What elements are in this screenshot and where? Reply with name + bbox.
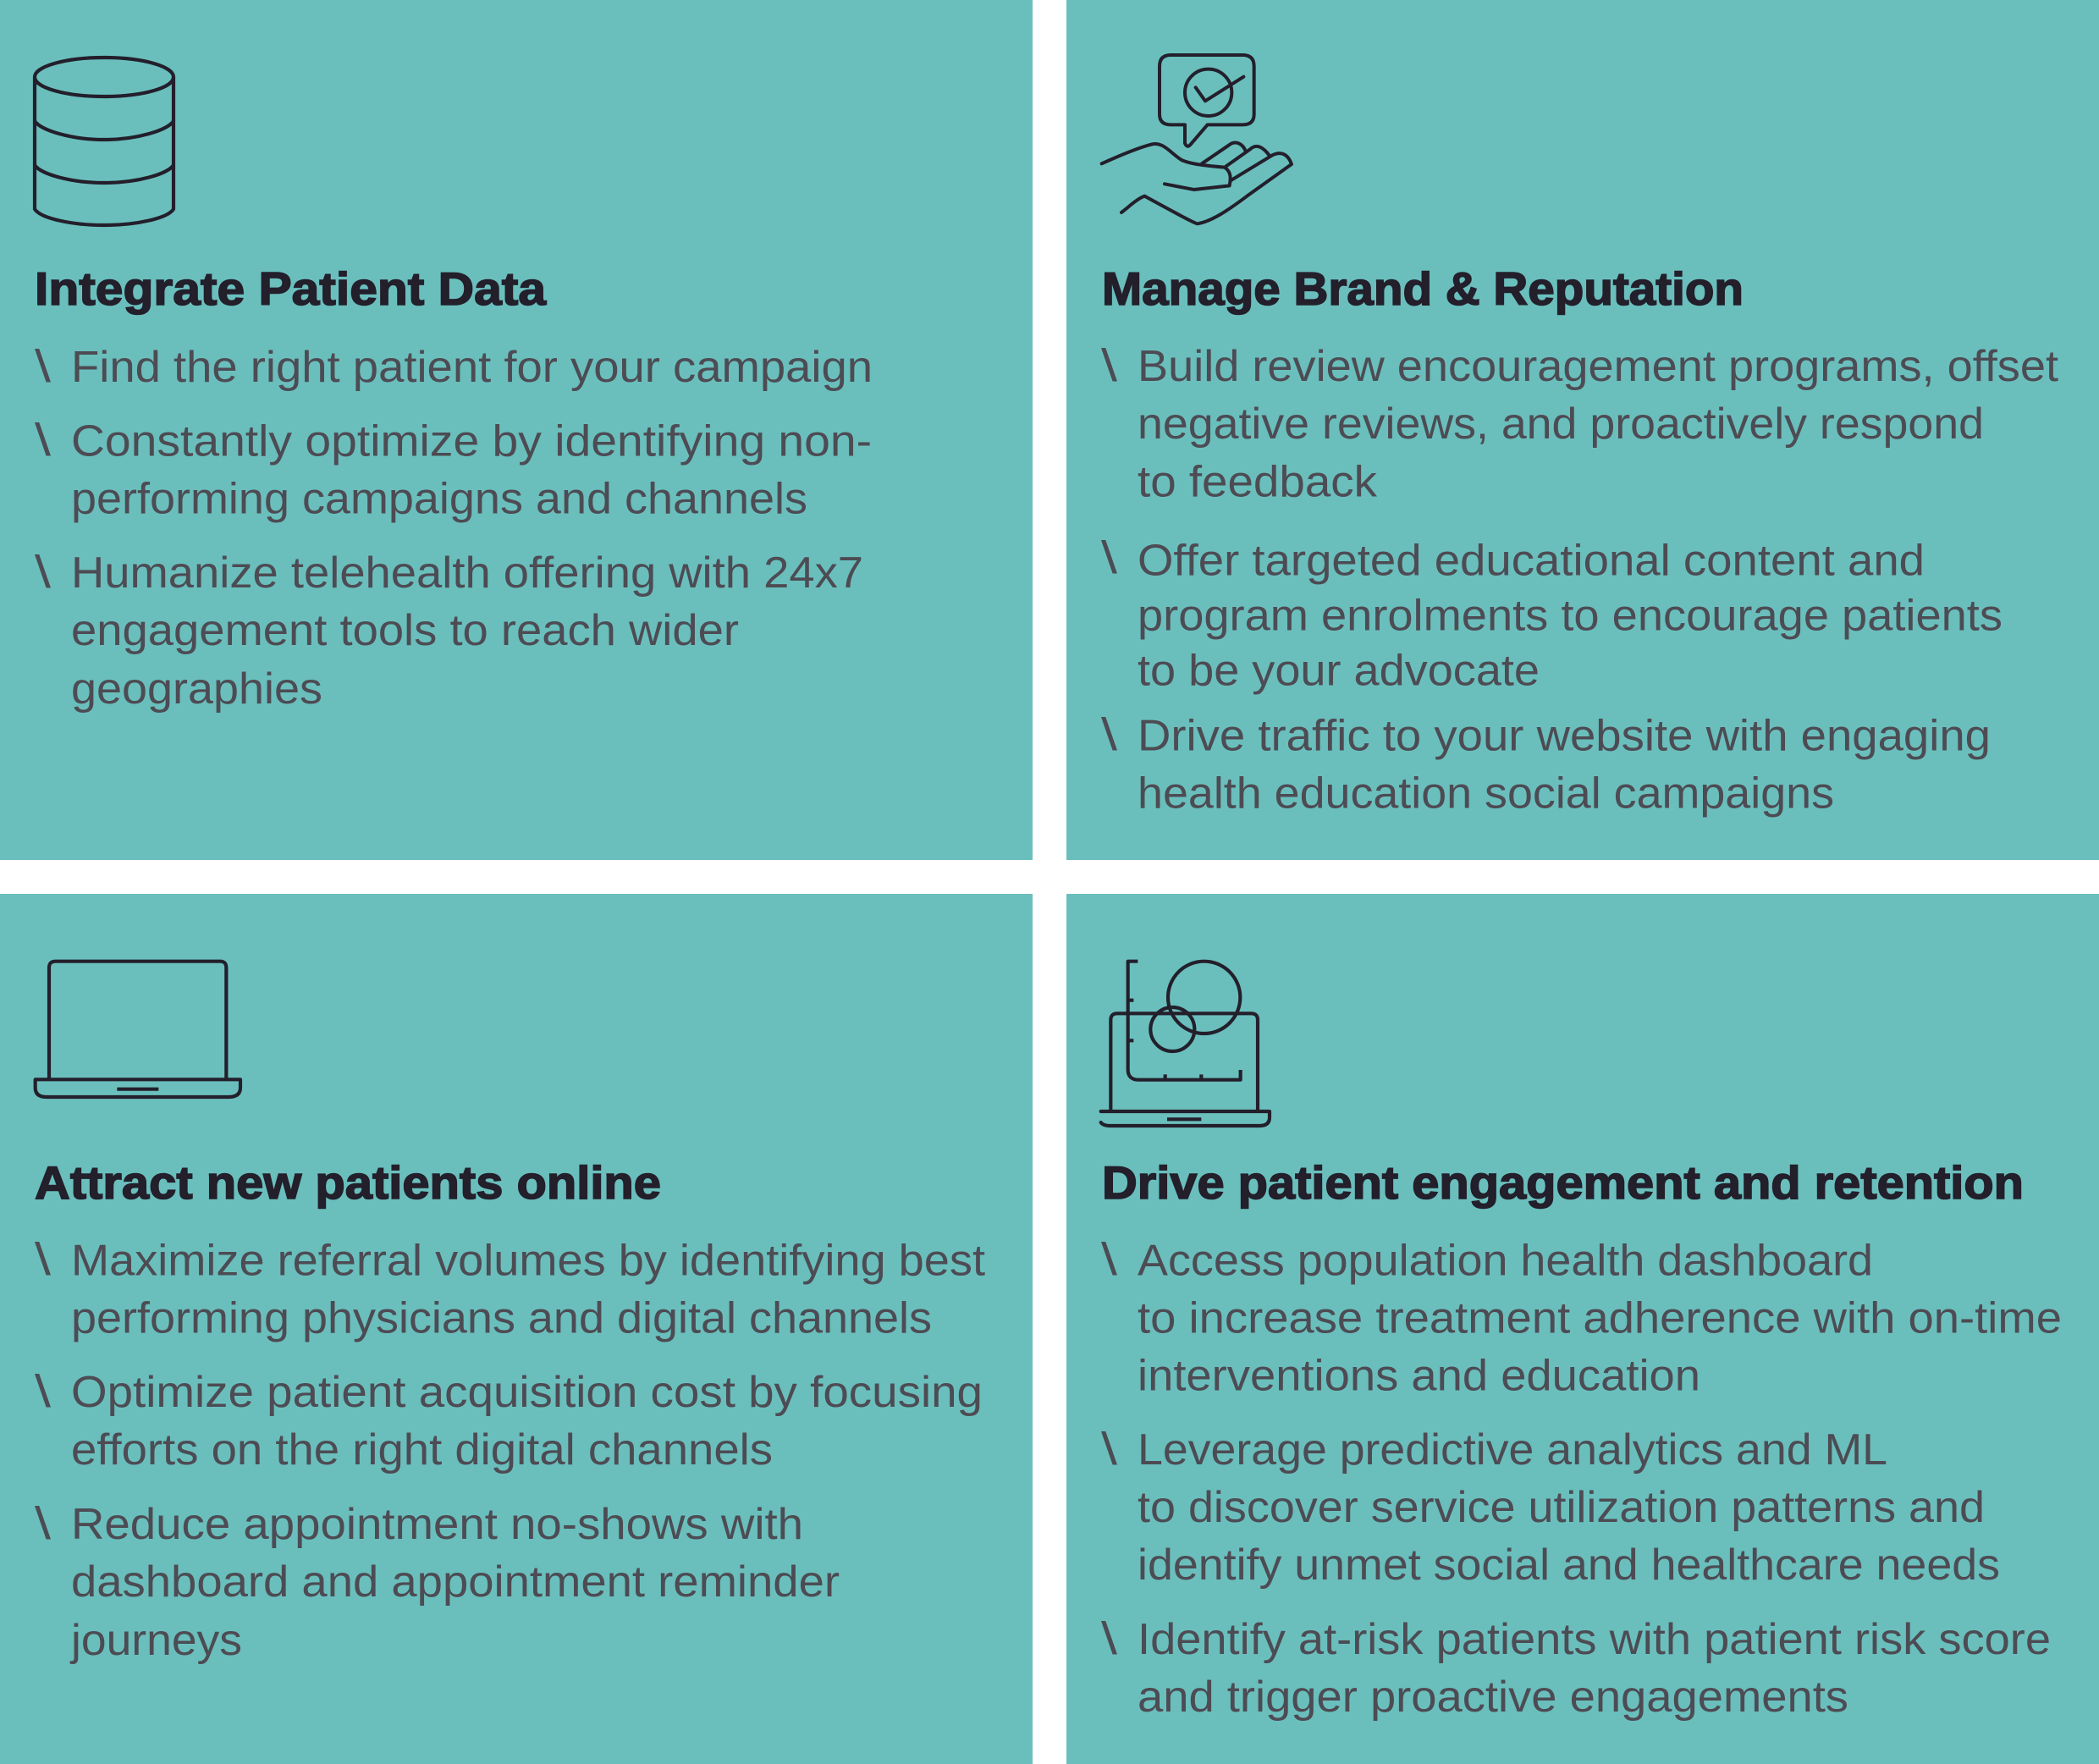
icon: database [35, 58, 174, 225]
bullet list: integrate patient data: \ [35, 547, 51, 598]
bullet list: integrate patient data: geographies [71, 664, 322, 714]
bullet list: integrate patient data: engagement tools to reach wider [71, 606, 739, 655]
bullet list: drive patient engagement and retention: identify unmet social and healthcare needs [1138, 1541, 2000, 1590]
bullet list: manage brand and reputation [1101, 340, 2059, 818]
heading: attract new patients online: Attract new patients online [35, 1156, 661, 1209]
bullet list: manage brand and reputation: to feedback [1138, 457, 1378, 506]
bullet list: integrate patient data: Find the right patient for your campaign [71, 343, 873, 392]
bullet list: manage brand and reputation: health education social campaigns [1138, 769, 1834, 818]
bullet list: drive patient engagement and retention [1101, 1234, 2062, 1722]
bullet list: attract new patients online: \ [35, 1366, 51, 1417]
bullet list: attract new patients online: efforts on the right digital channels [71, 1425, 773, 1475]
bullet list: drive patient engagement and retention: to increase treatment adherence with on-time [1138, 1293, 2062, 1342]
bullet list: attract new patients online [35, 1234, 986, 1665]
bullet list: attract new patients online: \ [35, 1234, 51, 1285]
bullet list: manage brand and reputation: program enrolments to encourage patients [1138, 591, 2003, 640]
bullet list: manage brand and reputation: \ [1101, 340, 1117, 391]
bullet list: integrate patient data: \ [35, 415, 51, 466]
bullet list: manage brand and reputation: Offer targeted educational content and [1138, 537, 1925, 586]
bullet list: integrate patient data: Constantly optimize by identifying non- [71, 416, 872, 466]
icon: hand holding speech bubble with check mark [1102, 55, 1292, 223]
bullet list: drive patient engagement and retention: \ [1101, 1424, 1117, 1475]
bullet list: drive patient engagement and retention: Identify at-risk patients with patient risk score [1138, 1615, 2051, 1664]
bullet list: drive patient engagement and retention: \ [1101, 1613, 1117, 1664]
bullet list: attract new patients online: journeys [69, 1616, 242, 1665]
bullet list: drive patient engagement and retention: Leverage predictive analytics and ML [1138, 1425, 1887, 1475]
bullet list: drive patient engagement and retention: and trigger proactive engagements [1138, 1673, 1848, 1722]
bullet list: integrate patient data: \ [35, 341, 51, 392]
bullet list: integrate patient data: performing campaigns and channels [71, 474, 807, 523]
bullet list: attract new patients online: Maximize referral volumes by identifying best [71, 1236, 986, 1285]
bullet list: manage brand and reputation: to be your advocate [1138, 647, 1540, 696]
bullet list: integrate patient data [35, 341, 873, 714]
bullet list: manage brand and reputation: negative reviews, and proactively respond [1138, 400, 1984, 449]
bullet list: drive patient engagement and retention: \ [1101, 1234, 1117, 1285]
icon: laptop [36, 962, 240, 1097]
bullet list: drive patient engagement and retention: Access population health dashboard [1138, 1236, 1873, 1285]
heading: manage brand and reputation: Manage Brand & Reputation [1102, 262, 1744, 315]
bullet list: integrate patient data: Humanize telehealth offering with 24x7 [71, 548, 863, 598]
panel: integrate patient data [0, 0, 1033, 860]
icon: laptop with bubble chart [1101, 962, 1270, 1126]
bullet list: attract new patients online: performing physicians and digital channels [71, 1293, 932, 1342]
bullet list: attract new patients online: Reduce appointment no-shows with [71, 1500, 803, 1549]
bullet list: manage brand and reputation: \ [1101, 532, 1117, 583]
panel: drive patient engagement and retention [1066, 894, 2099, 1764]
heading: drive patient engagement and retention: Drive patient engagement and retention [1102, 1156, 2024, 1209]
panel: attract new patients online [0, 894, 1033, 1764]
bullet list: attract new patients online: dashboard and appointment reminder [71, 1557, 840, 1607]
bullet list: manage brand and reputation: Build review encouragement programs, offset [1138, 342, 2059, 391]
bullet list: drive patient engagement and retention: interventions and education [1138, 1351, 1700, 1400]
bullet list: attract new patients online: \ [35, 1498, 51, 1549]
heading: integrate patient data: Integrate Patient Data [35, 262, 546, 315]
bullet list: manage brand and reputation: Drive traffic to your website with engaging [1138, 711, 1991, 760]
bullet list: manage brand and reputation: \ [1101, 709, 1117, 760]
bullet list: drive patient engagement and retention: to discover service utilization patterns and [1138, 1483, 1985, 1532]
panel: manage brand and reputation [1066, 0, 2099, 860]
bullet list: attract new patients online: Optimize patient acquisition cost by focusing [71, 1368, 983, 1417]
